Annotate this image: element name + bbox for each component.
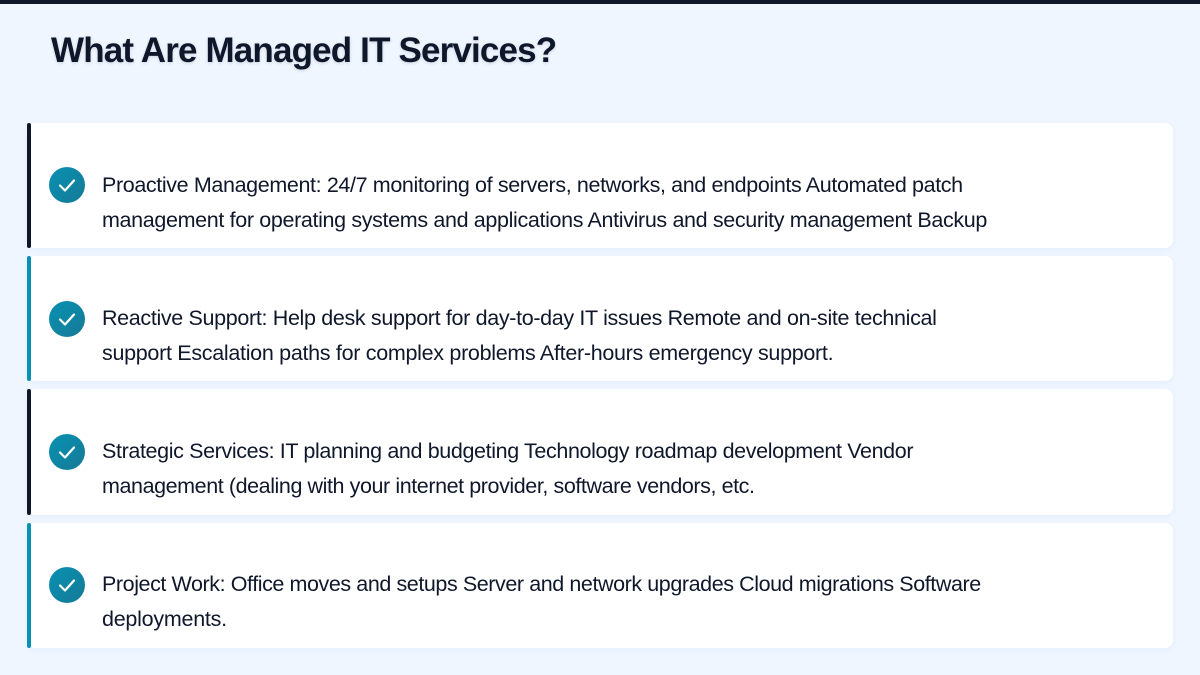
- icon: check: [49, 301, 85, 337]
- top accent bar: [0, 0, 1200, 4]
- panel: reactive support: support Escalation paths for complex problems After-hours emergency support.: [102, 341, 833, 365]
- text: project work: Project Work: Office moves and setups Server and network upgrades Cloud migrations Software: [102, 572, 981, 596]
- text: strategic services: Strategic Services: IT planning and budgeting Technology roadmap development Vendor: [102, 439, 913, 463]
- title: What Are Managed IT Services?: [51, 31, 556, 70]
- icon: check: [49, 167, 85, 203]
- panel: proactive management: [27, 123, 1173, 248]
- text: proactive management: Proactive Management: 24/7 monitoring of servers, networks, and endpoints Automated patch: [102, 173, 963, 197]
- panel: project work: deployments.: [102, 607, 227, 631]
- panel: proactive management: management for operating systems and applications Antivirus and security management Backup: [102, 208, 987, 232]
- icon: check: [49, 567, 85, 603]
- panel: strategic services: [27, 389, 1173, 515]
- panel: strategic services: management (dealing with your internet provider, software vendors, etc.: [102, 474, 755, 498]
- text: reactive support: Reactive Support: Help desk support for day-to-day IT issues Remote and on-site technical: [102, 306, 937, 330]
- panel: reactive support: [27, 256, 1173, 381]
- panel: project work: [27, 523, 1173, 648]
- icon: check: [49, 434, 85, 470]
